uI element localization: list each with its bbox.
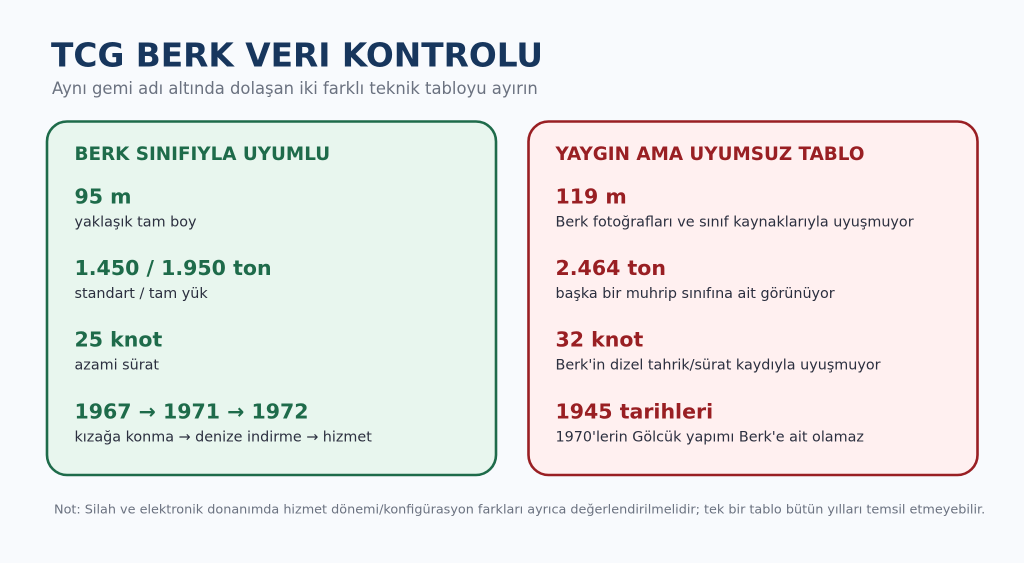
item: speed: 25 knot: [74, 328, 162, 352]
title: TCG BERK VERI KONTROLU: [51, 36, 543, 74]
item: displacement: [556, 256, 835, 302]
item: displacement: standart / tam yük: [74, 286, 208, 302]
item: length: [74, 184, 197, 230]
item: speed: azami sürat: [74, 358, 159, 374]
item: speed: [556, 328, 881, 374]
panel: common but incompatible table: [528, 122, 978, 475]
item: displacement: başka bir muhrip sınıfına ait görünüyor: [556, 286, 835, 302]
item: speed: [74, 328, 162, 374]
item: length: yaklaşık tam boy: [74, 214, 197, 230]
panel background: green: [47, 122, 496, 475]
item: displacement: 1.450 / 1.950 ton: [74, 256, 272, 280]
item: displacement: 2.464 ton: [556, 256, 666, 280]
panel heading: red: YAYGIN AMA UYUMSUZ TABLO: [554, 144, 864, 165]
item: displacement: [74, 256, 272, 302]
footnote: Not: Silah ve elektronik donanımda hizmet dönemi/konfigürasyon farkları ayrıca değerlendirilmelidir; tek bir tablo bütün yılları temsil etmeyebilir.: [54, 502, 985, 518]
item: dates: 1970'lerin Gölcük yapımı Berk'e ait olamaz: [556, 430, 864, 446]
item: dates: 1945 tarihleri: [556, 400, 713, 424]
item: length: Berk fotoğrafları ve sınıf kaynaklarıyla uyuşmuyor: [556, 214, 914, 230]
item: length: 119 m: [556, 184, 627, 208]
panel: compatible with Berk class: [47, 122, 496, 475]
item: dates: 1967 → 1971 → 1972: [74, 400, 309, 424]
item: length: 95 m: [74, 184, 132, 208]
panel heading: green: BERK SINIFIYLA UYUMLU: [74, 144, 330, 165]
item: dates: [74, 400, 372, 446]
item: speed: Berk'in dizel tahrik/sürat kaydıyla uyuşmuyor: [556, 358, 881, 374]
item: length: [556, 184, 914, 230]
panel background: red: [528, 122, 978, 475]
item: dates: [556, 400, 864, 446]
subtitle: Aynı gemi adı altında dolaşan iki farklı teknik tabloyu ayırın: [52, 79, 538, 98]
item: speed: 32 knot: [556, 328, 643, 352]
item: dates: kızağa konma → denize indirme → hizmet: [74, 430, 372, 446]
